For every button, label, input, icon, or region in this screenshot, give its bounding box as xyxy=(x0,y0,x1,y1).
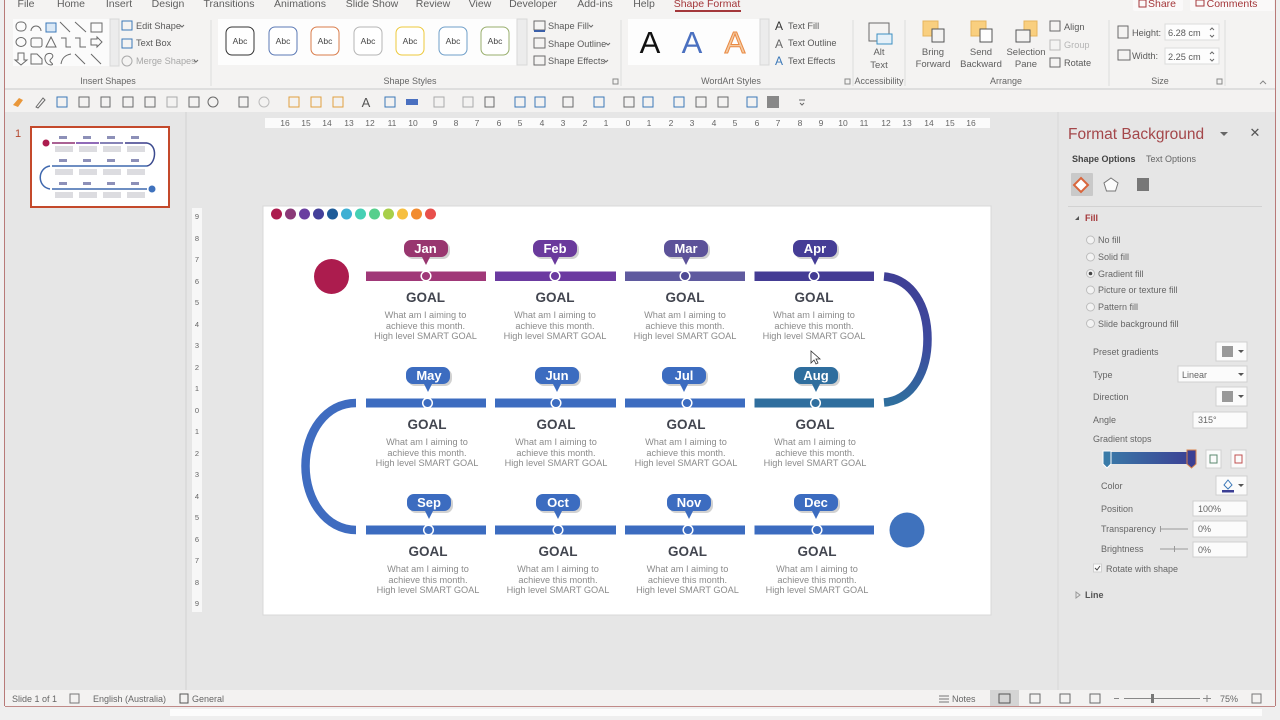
month: Jul: achieve this month. xyxy=(646,448,726,458)
arrange commands: Selection xyxy=(1006,47,1046,58)
month: Oct: What am I aiming to xyxy=(517,564,599,574)
format background panel xyxy=(1058,112,1274,690)
gradient controls xyxy=(1093,342,1247,574)
gradient controls: Direction xyxy=(1093,392,1129,402)
gradient controls: Transparency xyxy=(1101,524,1156,534)
size fields xyxy=(1118,24,1219,64)
month: Sep: What am I aiming to xyxy=(387,564,469,574)
shape styles gallery: Abc xyxy=(276,36,291,46)
vertical ruler: 7 xyxy=(195,556,199,565)
month: Mar: Mar xyxy=(674,241,698,256)
horizontal ruler: 1 xyxy=(647,118,652,128)
month: Jun: GOAL xyxy=(536,417,576,432)
month: Mar: achieve this month. xyxy=(645,321,725,331)
vertical ruler: 9 xyxy=(195,212,199,221)
arrange commands: Align xyxy=(1064,22,1084,32)
gradient controls: 0% xyxy=(1198,524,1211,534)
vertical ruler: 2 xyxy=(195,363,199,372)
horizontal ruler: 14 xyxy=(322,118,332,128)
month: Nov: High level SMART GOAL xyxy=(636,585,739,595)
size fields: 6.28 cm xyxy=(1168,28,1201,38)
shape styles gallery: Abc xyxy=(318,36,333,46)
month: Oct: Oct xyxy=(547,495,570,510)
month: Mar: GOAL xyxy=(666,290,704,305)
month: Jun: What am I aiming to xyxy=(515,437,597,447)
arrange commands: Bring xyxy=(922,47,944,58)
vertical ruler: 6 xyxy=(195,535,199,544)
thumbnail pane: 1 xyxy=(15,128,21,140)
month: Apr: achieve this month. xyxy=(774,321,854,331)
month: Dec: What am I aiming to xyxy=(776,564,858,574)
horizontal ruler: 4 xyxy=(540,118,545,128)
curved connector right xyxy=(884,276,928,402)
vertical ruler: 8 xyxy=(195,578,199,587)
shape styles gallery: Abc xyxy=(233,36,248,46)
text fill outline effects commands: A xyxy=(775,37,783,51)
gradient controls: Gradient stops xyxy=(1093,434,1152,444)
wordart styles gallery: A xyxy=(682,25,703,60)
month: Jun: achieve this month. xyxy=(516,448,596,458)
gradient controls: 0% xyxy=(1198,545,1211,555)
horizontal ruler xyxy=(265,118,990,128)
status bar: English (Australia) xyxy=(93,694,166,704)
text fill outline effects commands: Text Fill xyxy=(788,21,819,31)
month: Sep: High level SMART GOAL xyxy=(377,585,479,595)
month: Feb xyxy=(495,240,616,341)
status bar: Notes xyxy=(952,694,976,704)
horizontal ruler: 9 xyxy=(433,118,438,128)
shape fill outline effects commands: Shape Fill xyxy=(548,21,589,31)
horizontal ruler: 5 xyxy=(518,118,523,128)
edit shape text box merge shapes commands: Text Box xyxy=(136,38,172,48)
month: Aug: High level SMART GOAL xyxy=(764,458,866,468)
horizontal ruler: 10 xyxy=(838,118,848,128)
month: Apr: What am I aiming to xyxy=(773,310,855,320)
month: Feb: Feb xyxy=(543,241,567,256)
horizontal ruler: 12 xyxy=(881,118,891,128)
start marker circle xyxy=(314,259,349,294)
vertical ruler: 6 xyxy=(195,277,199,286)
month: Jan: GOAL xyxy=(406,290,445,305)
horizontal ruler: 4 xyxy=(712,118,717,128)
month: Jan: What am I aiming to xyxy=(385,310,466,320)
month: Dec: Dec xyxy=(804,495,828,510)
text fill outline effects commands: Text Outline xyxy=(788,38,837,48)
shape styles gallery: Abc xyxy=(488,36,503,46)
vertical ruler: 3 xyxy=(195,470,199,479)
status bar: Slide 1 of 1 xyxy=(12,694,57,704)
month: May xyxy=(366,367,486,468)
month: Mar: High level SMART GOAL xyxy=(634,331,736,341)
month: Feb: What am I aiming to xyxy=(514,310,596,320)
quick access toolbar: A xyxy=(362,95,371,110)
ribbon group labels: Insert Shapes xyxy=(80,76,136,86)
edit shape text box merge shapes commands: Merge Shapes xyxy=(136,56,196,66)
gradient controls: Linear xyxy=(1182,370,1207,380)
end marker circle xyxy=(890,512,924,548)
horizontal ruler: 16 xyxy=(966,118,976,128)
vertical ruler: 1 xyxy=(195,384,199,393)
month: Jun xyxy=(495,367,616,468)
curved connector left xyxy=(306,403,356,530)
month: Dec: achieve this month. xyxy=(777,575,857,585)
horizontal ruler: 13 xyxy=(344,118,354,128)
month: Dec xyxy=(754,494,874,595)
vertical ruler: 0 xyxy=(195,406,199,415)
gradient controls: Rotate with shape xyxy=(1106,564,1178,574)
month: Dec: High level SMART GOAL xyxy=(766,585,868,595)
month: Oct: High level SMART GOAL xyxy=(507,585,609,595)
panel tabs xyxy=(1072,154,1197,164)
month: Jul: What am I aiming to xyxy=(645,437,727,447)
horizontal ruler: 13 xyxy=(902,118,912,128)
horizontal ruler: 12 xyxy=(365,118,375,128)
horizontal ruler: 1 xyxy=(604,118,609,128)
size fields: 2.25 cm xyxy=(1168,52,1201,62)
status bar: 75% xyxy=(1220,694,1238,704)
month: Nov: What am I aiming to xyxy=(647,564,728,574)
edit shape text box merge shapes commands: Edit Shape xyxy=(136,21,181,31)
colour palette dots xyxy=(271,208,436,220)
slide xyxy=(263,206,991,615)
gradient controls: Color xyxy=(1101,481,1123,491)
ribbon group labels: Arrange xyxy=(990,76,1022,86)
month: May: High level SMART GOAL xyxy=(376,458,478,468)
shape fill outline effects commands: Shape Effects xyxy=(548,56,605,66)
ribbon group labels xyxy=(80,76,1169,86)
month: Sep xyxy=(366,494,486,595)
ribbon group labels: Accessibility xyxy=(854,76,904,86)
background window strip xyxy=(170,709,1262,716)
vertical ruler: 8 xyxy=(195,234,199,243)
text fill outline effects commands: A xyxy=(775,19,783,33)
arrange commands: Group xyxy=(1064,40,1090,50)
month: Sep: achieve this month. xyxy=(388,575,468,585)
month: Jan: High level SMART GOAL xyxy=(374,331,477,341)
month: Oct xyxy=(495,494,616,595)
arrange commands xyxy=(916,21,1091,70)
month: Jul: Jul xyxy=(675,368,693,383)
panel tabs: Shape Options xyxy=(1072,154,1136,164)
month: Apr: Apr xyxy=(804,241,826,256)
horizontal ruler: 10 xyxy=(408,118,418,128)
horizontal ruler: 5 xyxy=(733,118,738,128)
gradient controls: 100% xyxy=(1198,504,1221,514)
vertical ruler: 4 xyxy=(195,320,199,329)
fill section: Fill xyxy=(1085,213,1098,223)
horizontal ruler: 3 xyxy=(690,118,695,128)
shape fill outline effects commands xyxy=(534,21,610,66)
vertical ruler: 5 xyxy=(195,298,199,307)
vertical ruler: 2 xyxy=(195,449,199,458)
quick access toolbar xyxy=(5,90,1275,112)
month: May: GOAL xyxy=(408,417,446,432)
fill section: Gradient fill xyxy=(1098,269,1144,279)
month: Jul xyxy=(625,367,745,468)
gradient controls: Position xyxy=(1101,504,1133,514)
horizontal ruler: 7 xyxy=(776,118,781,128)
text fill outline effects commands xyxy=(775,19,837,68)
month: Aug xyxy=(754,367,874,468)
panel category icons xyxy=(1071,173,1149,196)
format background panel: ✕ xyxy=(1250,125,1260,140)
month: Jul: High level SMART GOAL xyxy=(635,458,737,468)
alt text command xyxy=(869,23,892,71)
fill section: Picture or texture fill xyxy=(1098,285,1178,295)
month: May: What am I aiming to xyxy=(386,437,468,447)
status bar xyxy=(5,690,1275,706)
month: Jan: achieve this month. xyxy=(386,321,465,331)
month: Jun: Jun xyxy=(545,368,569,383)
fill section xyxy=(1075,213,1179,329)
insert shapes gallery xyxy=(13,19,119,66)
horizontal ruler: 2 xyxy=(669,118,674,128)
month: Aug: What am I aiming to xyxy=(774,437,856,447)
month: Nov xyxy=(625,494,745,595)
fill section: Pattern fill xyxy=(1098,302,1138,312)
horizontal ruler: 16 xyxy=(280,118,290,128)
month: Apr: High level SMART GOAL xyxy=(763,331,865,341)
shape fill outline effects commands: Shape Outline xyxy=(548,39,606,49)
arrange commands: Send xyxy=(970,47,992,58)
workspace background xyxy=(5,110,1275,690)
horizontal ruler: 0 xyxy=(626,118,631,128)
month: Mar xyxy=(625,240,745,341)
month: Jan xyxy=(366,240,486,341)
ribbon xyxy=(5,0,1275,90)
arrange commands: Pane xyxy=(1015,59,1037,70)
wordart styles gallery: A xyxy=(640,25,661,60)
horizontal ruler: 15 xyxy=(301,118,311,128)
month: Sep: GOAL xyxy=(408,544,448,559)
horizontal ruler: 3 xyxy=(561,118,566,128)
month: Feb: achieve this month. xyxy=(515,321,595,331)
shape styles gallery xyxy=(218,19,527,65)
month: Apr: GOAL xyxy=(794,290,834,305)
month: Feb: High level SMART GOAL xyxy=(504,331,606,341)
gradient controls: Preset gradients xyxy=(1093,347,1159,357)
gradient controls: Angle xyxy=(1093,415,1116,425)
shape styles gallery: Abc xyxy=(446,36,461,46)
status bar: General xyxy=(192,694,224,704)
text fill outline effects commands: A xyxy=(775,54,783,68)
horizontal ruler: 8 xyxy=(798,118,803,128)
line section xyxy=(1076,590,1104,600)
fill section: Solid fill xyxy=(1098,252,1129,262)
panel tabs: Text Options xyxy=(1146,154,1197,164)
edit shape text box merge shapes commands xyxy=(122,21,198,66)
month: Nov: achieve this month. xyxy=(648,575,727,585)
ribbon group labels: Shape Styles xyxy=(383,76,437,86)
thumbnail pane xyxy=(15,112,186,690)
month: Dec: GOAL xyxy=(798,544,836,559)
month: Sep: Sep xyxy=(417,495,441,510)
horizontal ruler: 11 xyxy=(388,118,397,128)
shape styles gallery: Abc xyxy=(403,36,418,46)
horizontal ruler: 2 xyxy=(583,118,588,128)
horizontal ruler: 8 xyxy=(454,118,459,128)
fill section: No fill xyxy=(1098,235,1121,245)
month: Oct: GOAL xyxy=(538,544,578,559)
arrange commands: Forward xyxy=(916,59,950,70)
gradient controls: Type xyxy=(1093,370,1113,380)
mouse cursor xyxy=(811,351,820,364)
size fields: Width: xyxy=(1132,51,1158,61)
horizontal ruler: 15 xyxy=(945,118,955,128)
arrange commands: Rotate xyxy=(1064,58,1091,68)
vertical ruler: 9 xyxy=(195,599,199,608)
panel title: Format Background xyxy=(1068,126,1204,143)
fill section: Slide background fill xyxy=(1098,319,1179,329)
month: Aug: Aug xyxy=(803,368,829,383)
month: Jul: GOAL xyxy=(666,417,706,432)
ribbon group labels: WordArt Styles xyxy=(701,76,761,86)
month: Aug: achieve this month. xyxy=(775,448,855,458)
month: Feb: GOAL xyxy=(536,290,574,305)
text fill outline effects commands: Text Effects xyxy=(788,56,836,66)
slide thumbnail xyxy=(31,127,169,207)
wordart styles gallery xyxy=(628,19,769,65)
ribbon group labels: Size xyxy=(1151,76,1169,86)
share and comments buttons xyxy=(1133,0,1274,11)
month: Oct: achieve this month. xyxy=(518,575,598,585)
month: Nov: Nov xyxy=(677,495,702,510)
alt text command: Alt xyxy=(873,47,885,58)
month: May: May xyxy=(416,368,442,383)
size fields: Height: xyxy=(1132,28,1161,38)
horizontal ruler: 6 xyxy=(497,118,502,128)
vertical ruler: 5 xyxy=(195,513,199,522)
gradient controls: Brightness xyxy=(1101,544,1144,554)
horizontal ruler: 9 xyxy=(819,118,824,128)
month: Apr xyxy=(754,240,874,341)
month: May: achieve this month. xyxy=(387,448,467,458)
line section: Line xyxy=(1085,590,1104,600)
vertical ruler xyxy=(192,208,202,612)
horizontal ruler: 6 xyxy=(755,118,760,128)
month: Mar: What am I aiming to xyxy=(644,310,726,320)
horizontal ruler: 7 xyxy=(475,118,480,128)
add and remove stop buttons xyxy=(1206,450,1246,468)
wordart styles gallery: A xyxy=(725,25,746,60)
shape styles gallery: Abc xyxy=(361,36,376,46)
ribbon tabs xyxy=(18,0,741,12)
gradient controls: 315° xyxy=(1198,415,1217,425)
month: Aug: GOAL xyxy=(796,417,834,432)
horizontal ruler: 14 xyxy=(924,118,934,128)
month: Nov: GOAL xyxy=(668,544,707,559)
vertical ruler: 7 xyxy=(195,255,199,264)
vertical ruler: 3 xyxy=(195,341,199,350)
arrange commands: Backward xyxy=(960,59,1002,70)
gradient stops bar xyxy=(1103,450,1196,468)
horizontal ruler: 11 xyxy=(860,118,869,128)
month: Jan: Jan xyxy=(414,241,437,256)
vertical ruler: 1 xyxy=(195,427,199,436)
month: Jun: High level SMART GOAL xyxy=(505,458,607,468)
vertical ruler: 4 xyxy=(195,492,199,501)
alt text command: Text xyxy=(870,60,888,71)
